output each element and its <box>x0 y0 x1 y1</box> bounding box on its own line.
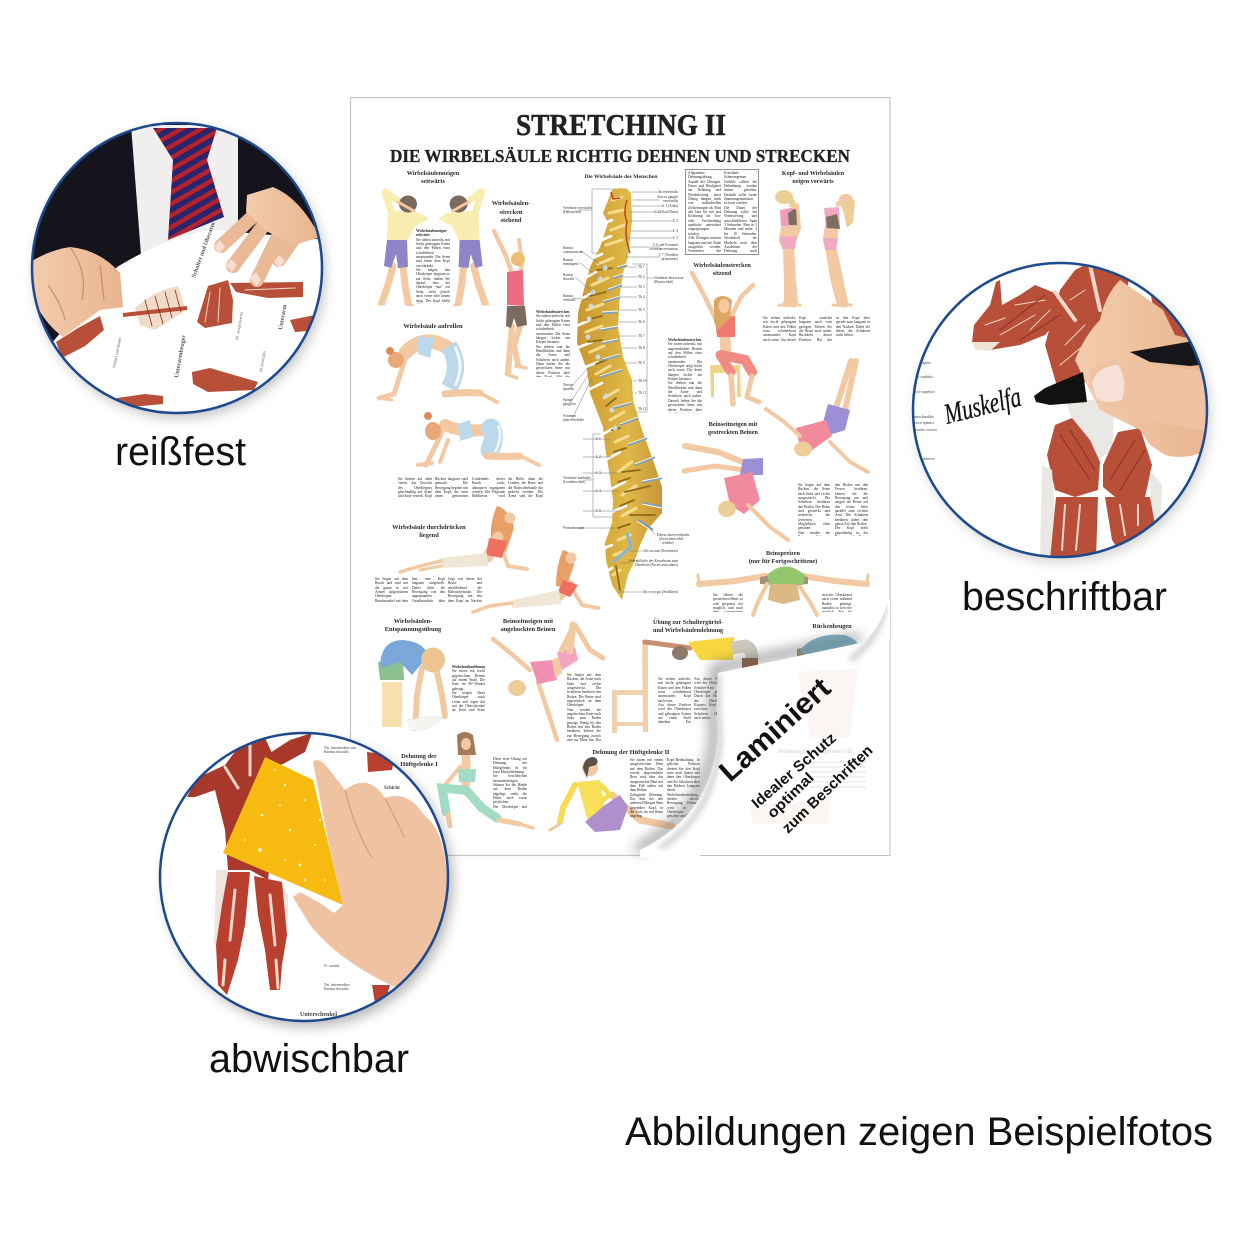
text: entspannung <box>452 665 485 711</box>
circle shadow <box>916 268 1210 562</box>
heading: strecken stehend: stehend <box>501 217 522 224</box>
figure: hip stretch 2 <box>550 757 672 832</box>
text: seitneigen: Wirbelsäulenneigen seitwärts <box>416 229 446 237</box>
figure: leg raise inverted left <box>684 446 788 540</box>
curl fold shading <box>850 605 885 660</box>
thumb <box>1090 366 1206 430</box>
spine labels right: A. vertebralis <box>658 190 679 194</box>
spine labels right: C 3 <box>673 219 678 223</box>
text: strecken stehend: Sie stehen aufrecht, mit leicht gebeugten Knien und den Füßen etwa schulterbreit auseinander. Die Arme hängen locker am Körper herunter. <box>536 314 570 344</box>
poster paper <box>53 230 321 412</box>
muscled arm <box>972 280 1060 350</box>
spine processes <box>572 197 655 590</box>
figure: side bend bent legs <box>493 625 603 740</box>
paper tiny text: Muskel und Skelett <box>111 336 123 368</box>
heading: sitzend: sitzend <box>713 270 732 277</box>
right hand back <box>246 187 320 245</box>
tie <box>153 128 224 240</box>
tiny labels: Schicht <box>384 786 400 791</box>
paper muscles <box>230 282 303 298</box>
muscle figure right arm <box>272 734 312 764</box>
text: huefte II col 1: Sie sitzen mit einem ausgestreckten Bein auf dem Boden. Das zweite, abgewinkelte Bein wird über das ausgestreckte Bein mit dem Fuß außen auf dem Boden. <box>630 758 663 792</box>
paper tiny text: Schulter und Oberarm <box>191 222 217 279</box>
label fragments: atissimas <box>916 477 931 482</box>
tiny labels: Nn. intermedius mit <box>324 745 357 750</box>
text: schulter col 1 <box>658 677 691 723</box>
heading: gestreckten beinen: Beinseitneigen mit <box>709 421 758 428</box>
muscle behind fingers <box>1151 296 1187 338</box>
text: gestreckt col 1: Sie liegen auf dem Rücken, die Arme nach links und rechts ausgestreckt. Die Schultern berühren den Boden. Die Beine sind gestreckt und senkrecht, die weitesten Möglichkeit ohne gehalten. <box>798 483 830 530</box>
curl shadow <box>636 638 860 850</box>
sponge <box>223 757 343 905</box>
figure: relaxation seated <box>378 640 445 731</box>
circle: reissfest photo <box>30 120 330 425</box>
text: huefte I: Sie beschleichen herzunterbringen. Stützen Sie die Hände auf dem Boden abgelegt, senkt die Hüfte nach vorne geschoben. <box>493 774 527 804</box>
heading: rueckenbeugen: Rückenbeugen <box>812 623 852 630</box>
sponge specks <box>244 769 326 881</box>
poster sheet <box>350 98 890 856</box>
heading: sitzend: Wirbelsäulenstrecken <box>693 262 751 269</box>
spine labels right: Th 1 <box>638 265 645 269</box>
text: allgemein col 2: Kreisläufe / Schmerzgrenze. Gefühle sollten bei Dehnübung werden immer gehalten. Deshalb sollte keine Spannungsintensität zu hoch werden. <box>724 171 757 205</box>
spine labels lower: Os coccygis (Steißbein) <box>644 590 679 594</box>
label fragments: studio ciciora <box>915 427 937 432</box>
spine column <box>577 188 662 600</box>
spine labels right: C 5 <box>673 236 678 240</box>
overlay <box>28 122 1216 1154</box>
label fragments: umuclinalsbs <box>913 414 935 419</box>
heading: gestreckten beinen: gestreckten Beinen <box>708 429 758 436</box>
figure: standing stretch <box>494 231 527 378</box>
muscle figure legs <box>214 870 288 945</box>
heading: angehockten beinen: Beinseitneigen mit <box>503 618 554 625</box>
text: angehockt <box>567 673 601 743</box>
paper tiny text: M. brachialis <box>258 350 267 372</box>
spine labels right: Th 2 <box>638 275 645 279</box>
laminiert label: Laminiert <box>713 672 838 788</box>
text: kopf col 3: so den Kopf über gerade zum langsam in den Nacken. Dabei bei dieser die Schultern nicht heben. <box>836 316 870 337</box>
spine labels left: intervertebrale <box>563 418 584 422</box>
spine labels left: (Lendenwirbel) <box>563 480 586 484</box>
spine labels right: vertebralis <box>663 199 679 203</box>
tiny labels: Unterschenkel <box>300 1012 337 1018</box>
caption: abwischbar: abwischbar <box>209 1037 409 1081</box>
text: strecken stehend <box>536 310 570 377</box>
text: sitzend: Sie sitzen aufrecht, mit angewinkelten Beinen auf den Füßen etwa schulterbreit auseinander. Die Oberkörper neigt leicht nach vorne. Die Arme hängen locker am Körper herunter. <box>668 342 702 381</box>
text: huefte II col 2: Kopf-Beinhaltung. In gleicher Position drehen Sie den Kopf erste nach hinten und dann den Oberkörper und die Schultern über den Rücken. Langsam durch Wirbelsäulendrehung, drehen oberste Bewegung. Dehnung wird in den Oberkörper zurück gehalten und Schulter. <box>667 758 700 818</box>
heading: schultergurtel: Übung zur Schultergürtel- <box>653 619 723 626</box>
spine labels left: Ramus <box>563 246 574 250</box>
spine labels left: ventralis <box>563 298 576 302</box>
circle: beschriftbar photo <box>913 262 1215 562</box>
spine leaders <box>570 192 674 592</box>
spine labels right: Saccus ganglii <box>657 195 678 199</box>
heading: durchdruecken: liegend <box>419 532 439 539</box>
right hand fingers <box>221 208 297 280</box>
figure: cat pose arched <box>378 337 497 402</box>
spine labels left: spinalis <box>563 387 575 391</box>
heading: strecken stehend: strecken <box>500 209 523 216</box>
spine labels left: L 3 <box>596 471 601 475</box>
heading: aufrollen: Wirbelsäule aufrollen <box>403 323 463 330</box>
text: schulter col 2: Aus dieser Position wird der Wirbelsäule, Schulter-Arm Oberkörper gedehnt. Durch das Absenken des Oberkörpers Körpers, Kopf bleibt zwischen der Schultern Hüftlage nach unten. <box>694 677 727 720</box>
figure: head backward <box>823 194 855 306</box>
spine labels right: Th 6 <box>638 320 645 324</box>
spine labels right: Th 3 <box>638 285 645 289</box>
distant detail <box>367 752 395 1003</box>
spine labels left: Ramus <box>563 273 574 277</box>
figure: side bend right <box>438 192 488 305</box>
heading: huefte 1: Hüftgelenke I <box>400 761 438 768</box>
heading: seitwaerts: Wirbelsäulenneigen <box>407 170 460 177</box>
text: huefte I: Diese erste Übung zur Dehnung des Hüftgelenks ist für erste Muskeldehnung. <box>493 757 527 774</box>
spine labels left: L 2 <box>596 455 601 459</box>
caption: sample photos note: Abbildungen zeigen Beispielfotos <box>625 1110 1213 1154</box>
heading: beinspreizen: Beinspreizen <box>766 550 801 557</box>
spine labels right: (Brustwirbel) <box>654 280 674 284</box>
figure: straddle <box>698 566 868 615</box>
spine labels right: Th 12 <box>638 407 647 411</box>
spine labels lower: Discus intervertebralis <box>657 533 690 537</box>
shirt <box>131 125 238 255</box>
spine labels right: Th 5 <box>638 308 645 312</box>
spine labels lower <box>629 533 690 594</box>
spine labels right: Th 9 <box>638 361 645 365</box>
label fragments: ae capitis <box>916 360 931 365</box>
figure: cobra high <box>400 506 527 572</box>
poster title: STRETCHING II <box>516 107 726 142</box>
faint figure under sheet <box>750 668 858 824</box>
poster border under curl <box>700 640 890 856</box>
spine labels left: Ramus <box>563 258 574 262</box>
spine labels right: Th 4 <box>638 295 645 299</box>
heading: beinspreizen: (nur für Fortgeschrittene) <box>749 558 817 565</box>
spine labels lower: Gelenkfläche des Kreuzbeins zum <box>629 559 678 563</box>
poster subtitle: DIE WIRBELSÄULE RICHTIG DEHNEN UND STRECKEN <box>390 146 850 166</box>
spine labels right: Th 8 <box>638 346 645 350</box>
text: gestreckt col 2: den Boden mit den Fersen berühren, kehren Sie die Bewegung um und neigen die Beine auf den rechte Seite parallel zum rechten Arm. Die Schultern berühren dabei den ganze Zeit den Boden. <box>835 483 868 526</box>
text blocks <box>375 171 870 818</box>
text: entspannung: Sie sitzen mit leicht gegrätschten Beinen auf einem Stuhl. Die Knie im 90°-Winkel gebeugt. <box>452 669 485 691</box>
page curl: laminated corner <box>636 600 890 857</box>
tiny labels: Ramus dorsalis <box>324 749 349 754</box>
text: sitzend: Wirbelsäulenstrecken <box>668 338 701 342</box>
spine labels right: prominens) <box>662 257 679 261</box>
tiny labels <box>300 745 400 1018</box>
pen <box>1034 372 1087 405</box>
spine labels left: communicans <box>563 250 584 254</box>
label fragments: tricce spinaci <box>913 420 935 425</box>
text: huefte II col 1 <box>630 758 663 818</box>
spine labels left: L 1 <box>596 437 601 441</box>
paper tiny text <box>111 222 288 378</box>
caption: reissfest: reißfest <box>115 430 246 474</box>
handwriting: Muskelfa <box>940 381 1024 431</box>
spine labels right: C 1 (Atlas) <box>662 204 679 208</box>
figure: cobra low <box>473 550 598 612</box>
caption: beschriftbar: beschriftbar <box>962 575 1167 619</box>
heading: kopf vorwaerts: Kopf- und Wirbelsäulen <box>782 171 845 177</box>
circle border <box>160 733 448 1021</box>
spine labels right: costotransversarium <box>649 247 678 251</box>
spine labels right: C 4 <box>673 229 678 233</box>
figure: seated stretch <box>692 273 759 404</box>
spine labels left: (Halswirbel) <box>563 210 582 214</box>
finger nails <box>214 240 285 287</box>
spine artery <box>611 192 630 253</box>
text: entspannung: Wirbelsäulendehnung <box>452 665 485 669</box>
text: angehockt: Sie liegen auf dem Rücken, die Arme nach links und rechts ausgestreckt. Die Schultern berühren den Boden. Die Beine sind angewinkelt an dem Oberkörper. <box>567 673 601 707</box>
spine labels right: Th 10 <box>638 379 647 383</box>
figure: leg raise inverted right <box>766 361 868 472</box>
spine sacral canal <box>613 533 631 562</box>
spine labels lower: (Zwischenwirbel- <box>659 537 685 541</box>
label fragments: or cephitis <box>916 374 933 379</box>
spine title: Die Wirbelsäule des Menschen <box>585 174 658 180</box>
heading: huefte 1: Dehnung der <box>401 753 437 760</box>
heading: durchdruecken: Wirbelsäule durchdrücken <box>392 524 466 531</box>
spine labels left: meningeus <box>563 262 579 266</box>
spine labels left: L 4 <box>596 489 601 493</box>
label fragments: iricce inferior <box>913 456 936 461</box>
left hand <box>30 247 123 337</box>
text: strecken stehend: Wirbelsäulenstrecken <box>536 310 569 314</box>
text: allgemein col 2 <box>724 171 757 253</box>
box frame: allgemeine hinweise <box>686 170 758 254</box>
text: huefte I <box>493 757 527 809</box>
faint text under sheet <box>810 762 866 787</box>
figure: side bend left <box>379 192 429 305</box>
lower muscles <box>1065 400 1115 460</box>
spine labels right: C 2 (Axis/Dens) <box>654 210 679 214</box>
spine labels lower: Darmbein (Facies auricularis) <box>635 563 679 567</box>
text: durchdruecken col 1: Sie liegen auf dem Bauch und sind mit die ganze in von Armen aufgestützten Oberkörper. <box>375 577 408 598</box>
tiny labels: Ramus dorsalis <box>324 986 349 991</box>
heading: kopf vorwaerts: neigen vorwärts <box>792 179 834 185</box>
heading: entspannungsuebung: Entspannungsübung <box>385 626 442 633</box>
heading: huefte 2: Dehnung der Hüftgelenke II <box>592 749 670 756</box>
spine labels left: Nervus <box>563 383 574 387</box>
figure: chair shoulder stretch <box>612 637 758 733</box>
circle: abwischbar photo <box>160 733 453 1027</box>
circle border <box>32 123 322 413</box>
zum beschriften label: zum Beschriften <box>779 742 876 837</box>
spine discs <box>600 264 662 531</box>
spine labels lower: Os sacrum (Kreuzbein) <box>644 549 679 553</box>
paper tiny text: M. triceps brachii <box>234 311 244 340</box>
muscled back <box>1045 266 1128 384</box>
circle shadow <box>35 128 325 418</box>
hand back <box>1075 280 1215 457</box>
heading: schultergurtel: und Wirbelsäulendehnung <box>653 627 724 634</box>
spine labels left: Vertebrae cervicales <box>563 206 593 210</box>
spine labels left: Vertebrae lumbales <box>563 476 591 480</box>
figure: hip stretch 1 <box>442 732 533 828</box>
heading: seitwaerts: seitwärts <box>421 178 445 185</box>
spine region boxes <box>592 189 647 517</box>
spine labels lower: scheibe) <box>662 541 675 545</box>
tiny labels: N. suralis <box>324 963 340 968</box>
label fragments: ricce superior <box>913 389 936 394</box>
spine labels right: Vertebrae thoracicae <box>654 276 684 280</box>
spine labels right: C 6 und Foramen <box>653 243 678 247</box>
heading: entspannungsuebung: Wirbelsäulen- <box>394 618 432 625</box>
optimal label: optimal <box>764 769 818 822</box>
spine labels right: Th 7 <box>638 334 645 338</box>
spine labels right: C 7 (Vertebra <box>659 253 678 257</box>
tiny labels: Nn. intermedius <box>324 982 350 987</box>
spine labels left: Ramus <box>563 294 574 298</box>
text: schulter col 1: Sie stehen aufrecht, mit leicht gebeugten Knien und den Füßen etwa schulterbreit auseinander, Kopf nach vorn. <box>658 677 691 703</box>
text: allgemein col 1: Allgemeine Dehnungsübung. Anzahl der Übungen, Dauer und Häufigkeit der Dehnung und Wiederholung einer Übung hängen stark von individuellen Zielsetzungen ab. Man übe kurz bis mit und Erfahrung im Ton- oder Verschiebung qualitativ unterstützt eingesprungen werden. <box>688 171 721 236</box>
spine labels left <box>563 206 601 530</box>
circle shadow <box>165 739 453 1027</box>
spine labels left: Spinal- <box>563 398 574 402</box>
circle border <box>913 263 1207 557</box>
hand <box>293 760 447 987</box>
spine nerve knobs <box>586 266 618 430</box>
paper tiny text: Unterarmbeuger <box>174 334 188 378</box>
spine labels right: Th 11 <box>638 391 647 395</box>
label fragments <box>914 361 937 460</box>
spine illustration <box>563 188 690 600</box>
figure: head forward <box>775 190 800 306</box>
spine labels left: Promontorium <box>563 526 584 530</box>
spine labels left: Foramen <box>563 414 576 418</box>
heading: strecken stehend: Wirbelsäulen- <box>492 200 530 207</box>
paper tiny text: Unterarm <box>278 304 288 330</box>
spine labels left: ganglion <box>563 402 576 406</box>
spine labels right <box>638 190 684 411</box>
idealer schutz label: Idealer Schutz <box>748 730 840 812</box>
faint heading under sheet: Dehnung der Hüftgelenke III <box>778 749 853 755</box>
figure: back bend <box>797 635 860 670</box>
spine labels left: L 5 <box>596 509 601 513</box>
heading: angehockten beinen: angehockten Beinen <box>501 626 556 633</box>
spine labels left: dorsalis <box>563 277 575 281</box>
figure: cat pose hollow <box>418 412 539 465</box>
text: seitneigen: Sie stehen aufrecht, mit leicht gebeugten Knien und den Füßen etwa schulterbreit auseinander. Die Arme sind hinter dem Kopf verschränkt. <box>416 238 450 268</box>
text: sitzend <box>668 338 702 413</box>
muscle figure torso <box>187 740 272 879</box>
text: seitneigen <box>416 229 450 304</box>
